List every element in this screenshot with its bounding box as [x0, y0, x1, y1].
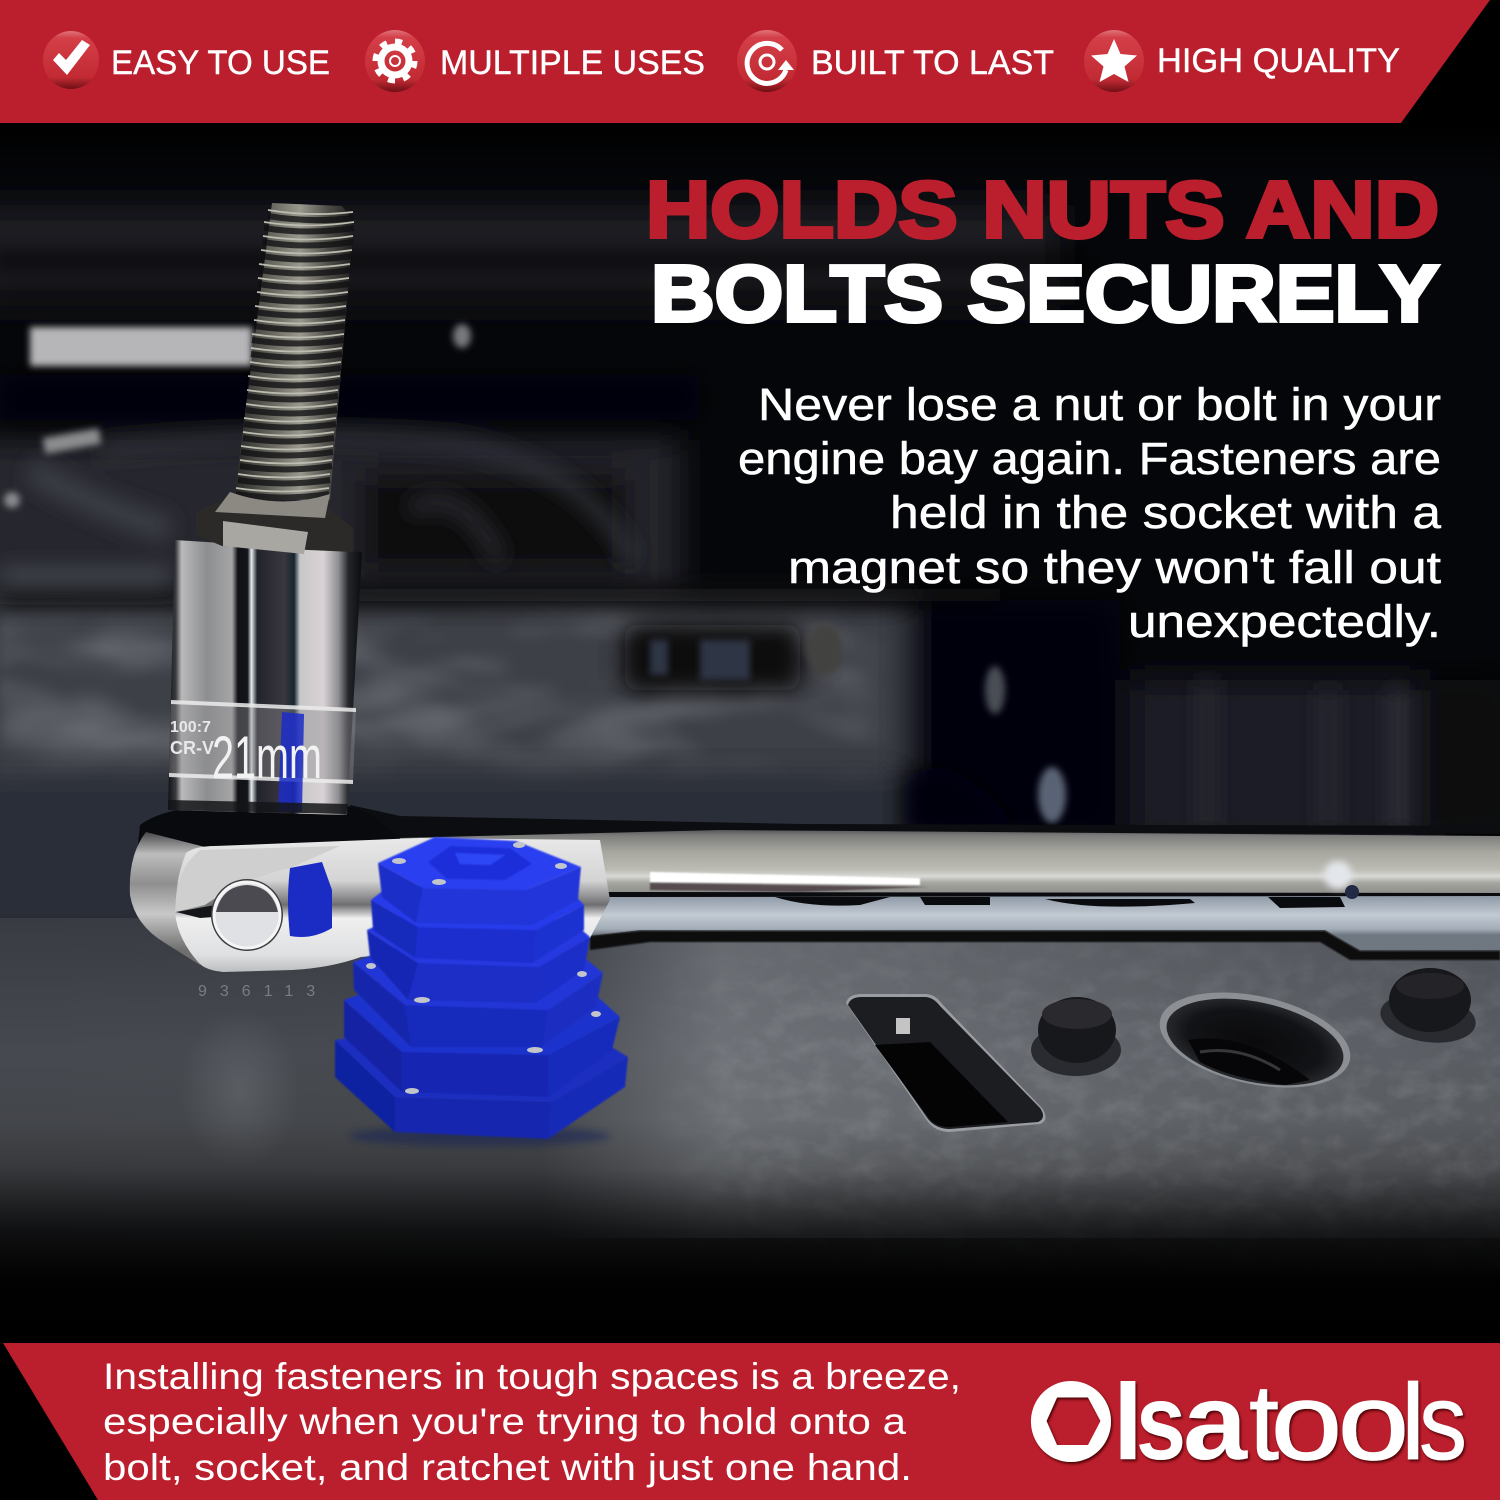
bolt in surface left: [1031, 997, 1121, 1076]
shadow under handle: [590, 931, 1500, 960]
headline line 2: BOLTS SECURELY: [651, 249, 1439, 338]
layer 5: [344, 980, 620, 1097]
banner caption: Installing fasteners in tough spaces is a breeze,: [103, 1356, 961, 1397]
description text: [738, 379, 1442, 647]
socket marked 21mm: 21mm: [212, 724, 322, 791]
icon: star badge: [1084, 30, 1144, 92]
ratchet head: [130, 805, 610, 972]
logo: Olsatools: o: [1271, 1361, 1342, 1482]
upper chrome band: [400, 830, 1500, 893]
fade of surface to black: [0, 1120, 1500, 1344]
magnet dots: [366, 842, 601, 1094]
headline line 1: HOLDS NUTS AND: [646, 165, 1439, 254]
layer 4: [353, 945, 603, 1047]
layer 1: [378, 837, 581, 925]
layer 3: [367, 915, 590, 1003]
logo wordmark: l: [1113, 1361, 1143, 1482]
logo: Olsatools: o: [1338, 1361, 1409, 1482]
outer chrome lobe: [130, 832, 205, 965]
nut and washer: [196, 492, 353, 554]
banner caption: especially when you're trying to hold onto a: [103, 1401, 906, 1442]
description text: unexpectedly.: [1128, 596, 1441, 647]
hex recess: [428, 846, 532, 880]
dark head ring: [132, 805, 400, 900]
photo background: blurred engine bay: [0, 177, 1500, 918]
bottom banner: [3, 1343, 1500, 1500]
logo: Olsatools: s: [1136, 1361, 1186, 1482]
bolt in surface right: [1377, 968, 1479, 1048]
logo hex nut O: [1031, 1381, 1111, 1462]
machined engine surface: [0, 880, 1500, 1344]
stack shadow: [350, 1126, 610, 1146]
icon: cycle gear badge: [737, 30, 797, 92]
logo: Olsatools: s: [1419, 1361, 1467, 1482]
main chrome lobe: [175, 838, 610, 972]
socket marked 21mm: [168, 540, 362, 815]
description text: held in the socket with a: [890, 487, 1442, 538]
description text: magnet so they won't fall out: [788, 542, 1442, 593]
ratchet release button: [211, 879, 283, 951]
benefit: easy to use: [43, 31, 330, 89]
label: BUILT TO LAST: [811, 44, 1054, 82]
top benefits banner: [0, 0, 1490, 123]
logo: Olsatools: [1031, 1361, 1467, 1482]
logo: Olsatools: a: [1183, 1361, 1248, 1482]
lower chrome band: [560, 895, 1500, 950]
logo: Olsatools: l: [1401, 1361, 1425, 1482]
logo: Olsatools: t: [1249, 1361, 1279, 1482]
icon: check mark badge: [43, 31, 99, 89]
black top plate of ratchet: [350, 805, 1500, 845]
label: EASY TO USE: [111, 44, 330, 82]
ratchet handle: [350, 805, 1500, 960]
blue hexagonal socket holder stack: [335, 837, 628, 1146]
layer 6: [335, 1030, 628, 1139]
banner caption: [103, 1356, 961, 1488]
socket marked 21mm: 100:7: [170, 719, 211, 736]
surface grain on the right part: [723, 971, 1500, 1198]
benefit: built to last: [737, 30, 1054, 92]
bolt with threads: [196, 203, 354, 554]
icon: gear badge: [365, 30, 425, 92]
stamped numbers: 936113: [198, 983, 328, 1000]
layer 2: [371, 885, 584, 963]
benefit: high quality: [1084, 30, 1400, 92]
description text: Never lose a nut or bolt in your: [758, 379, 1441, 430]
round hole in surface: [1151, 977, 1359, 1103]
description text: engine bay again. Fasteners are: [738, 433, 1441, 484]
banner caption: bolt, socket, and ratchet with just one hand.: [103, 1447, 912, 1488]
label: MULTIPLE USES: [440, 44, 705, 82]
rectangular slot: [846, 994, 1046, 1132]
benefit: multiple uses: [365, 30, 705, 92]
socket marked 21mm: CR-V: [170, 738, 214, 758]
headline: [646, 165, 1439, 338]
top face: [378, 837, 581, 890]
blue reflection on chrome: [288, 862, 332, 937]
label: HIGH QUALITY: [1157, 42, 1400, 80]
dark seam and slots: [600, 892, 1500, 908]
